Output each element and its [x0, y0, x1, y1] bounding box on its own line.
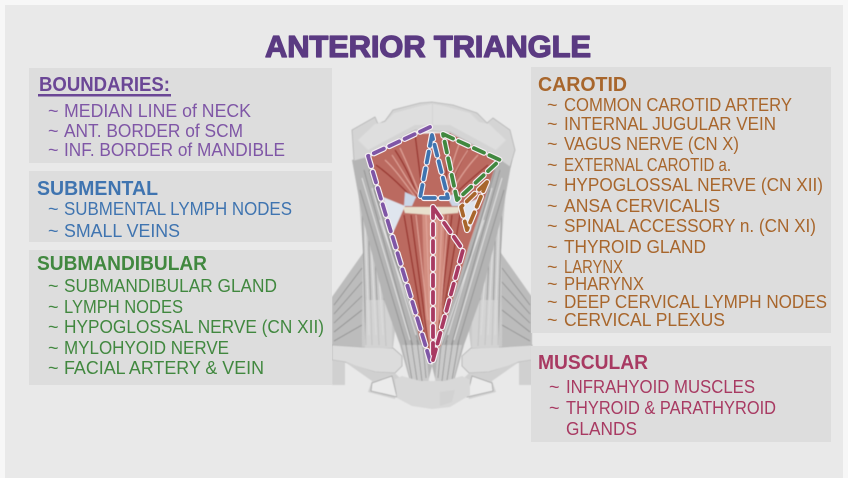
panel: boundaries [29, 68, 332, 163]
triangle outline: submental [420, 135, 448, 198]
carotid list [547, 95, 827, 330]
muscular list: ~ [549, 398, 560, 418]
muscular list: GLANDS [566, 419, 637, 439]
carotid list: ~ [547, 114, 558, 134]
triangle outline: submandibular [443, 134, 500, 200]
submandibular list: ~ [48, 297, 59, 317]
panel: muscular [531, 346, 831, 442]
submandibular list: ~ [48, 338, 59, 358]
triangle outline: carotid [461, 182, 487, 230]
submandibular list: SUBMANDIBULAR GLAND [64, 276, 277, 296]
submandibular list: ~ [48, 317, 59, 337]
submental list [48, 199, 292, 241]
submental heading: SUBMENTAL [37, 178, 158, 200]
carotid list: ~ [547, 175, 558, 195]
carotid background [531, 67, 831, 333]
panel: submental [29, 171, 332, 242]
carotid list: COMMON CAROTID ARTERY [564, 95, 792, 115]
carotid list: DEEP CERVICAL LYMPH NODES [564, 292, 827, 312]
boundaries list: ~ [48, 121, 59, 141]
carotid list: ~ [547, 292, 558, 312]
carotid list: THYROID GLAND [564, 237, 706, 257]
muscular heading: MUSCULAR [538, 352, 649, 374]
carotid list: SPINAL ACCESSORY n. (CN XI) [564, 216, 816, 236]
muscular list: INFRAHYOID MUSCLES [566, 377, 755, 397]
panel: submandibular [29, 250, 332, 385]
muscular list: THYROID & PARATHYROID [566, 398, 776, 418]
carotid list: ~ [547, 257, 558, 277]
submandibular list: ~ [48, 276, 59, 296]
neck base layers [332, 157, 532, 409]
carotid list: VAGUS NERVE (CN X) [564, 134, 739, 154]
submandibular list: LYMPH NODES [64, 297, 183, 317]
submental list: ~ [48, 221, 59, 241]
boundaries list: MEDIAN LINE of NECK [64, 101, 251, 121]
carotid list: CERVICAL PLEXUS [564, 310, 725, 330]
submental background [29, 171, 332, 242]
red neck muscles [370, 133, 498, 362]
carotid list: ~ [547, 274, 558, 294]
submandibular list: HYPOGLOSSAL NERVE (CN XII) [64, 317, 324, 337]
carotid list: HYPOGLOSSAL NERVE (CN XII) [564, 175, 823, 195]
carotid heading: CAROTID [538, 74, 627, 96]
carotid list: INTERNAL JUGULAR VEIN [564, 114, 776, 134]
boundaries list: ANT. BORDER of SCM [64, 121, 243, 141]
boundaries background [29, 68, 332, 163]
carotid list: EXTERNAL CAROTID a. [564, 155, 731, 175]
carotid list: PHARYNX [564, 274, 644, 294]
boundaries list [48, 101, 285, 160]
panel: carotid [531, 67, 831, 333]
boundaries list: ~ [48, 101, 59, 121]
carotid list: ~ [547, 216, 558, 236]
carotid list: ~ [547, 155, 558, 175]
submental list: SUBMENTAL LYMPH NODES [64, 199, 292, 219]
boundaries heading: BOUNDARIES: [39, 74, 170, 96]
muscular background [531, 346, 831, 442]
submental list: SMALL VEINS [64, 221, 180, 241]
submandibular heading: SUBMANDIBULAR [37, 253, 208, 275]
boundaries list: ~ [48, 140, 59, 160]
carotid list: ~ [547, 196, 558, 216]
submandibular list: ~ [48, 358, 59, 378]
submandibular list: MYLOHYOID NERVE [64, 338, 229, 358]
muscular list: ~ [549, 377, 560, 397]
submandibular background [29, 250, 332, 385]
title: ANTERIOR TRIANGLE [265, 29, 591, 64]
carotid list: ~ [547, 134, 558, 154]
mandible [352, 102, 515, 167]
submandibular list [48, 276, 324, 378]
boundaries underline [38, 94, 171, 96]
carotid list: ~ [547, 237, 558, 257]
muscular list [549, 377, 776, 439]
triangle outline: boundaries [368, 127, 432, 367]
submental list: ~ [48, 199, 59, 219]
boundaries list: INF. BORDER of MANDIBLE [64, 140, 285, 160]
illustration: anterior neck anatomy [332, 102, 532, 409]
carotid list: LARYNX [564, 257, 623, 277]
carotid list: ANSA CERVICALIS [564, 196, 720, 216]
carotid list: ~ [547, 310, 558, 330]
carotid list: ~ [547, 95, 558, 115]
triangle outline: muscular [433, 207, 463, 360]
submandibular list: FACIAL ARTERY & VEIN [64, 358, 264, 378]
